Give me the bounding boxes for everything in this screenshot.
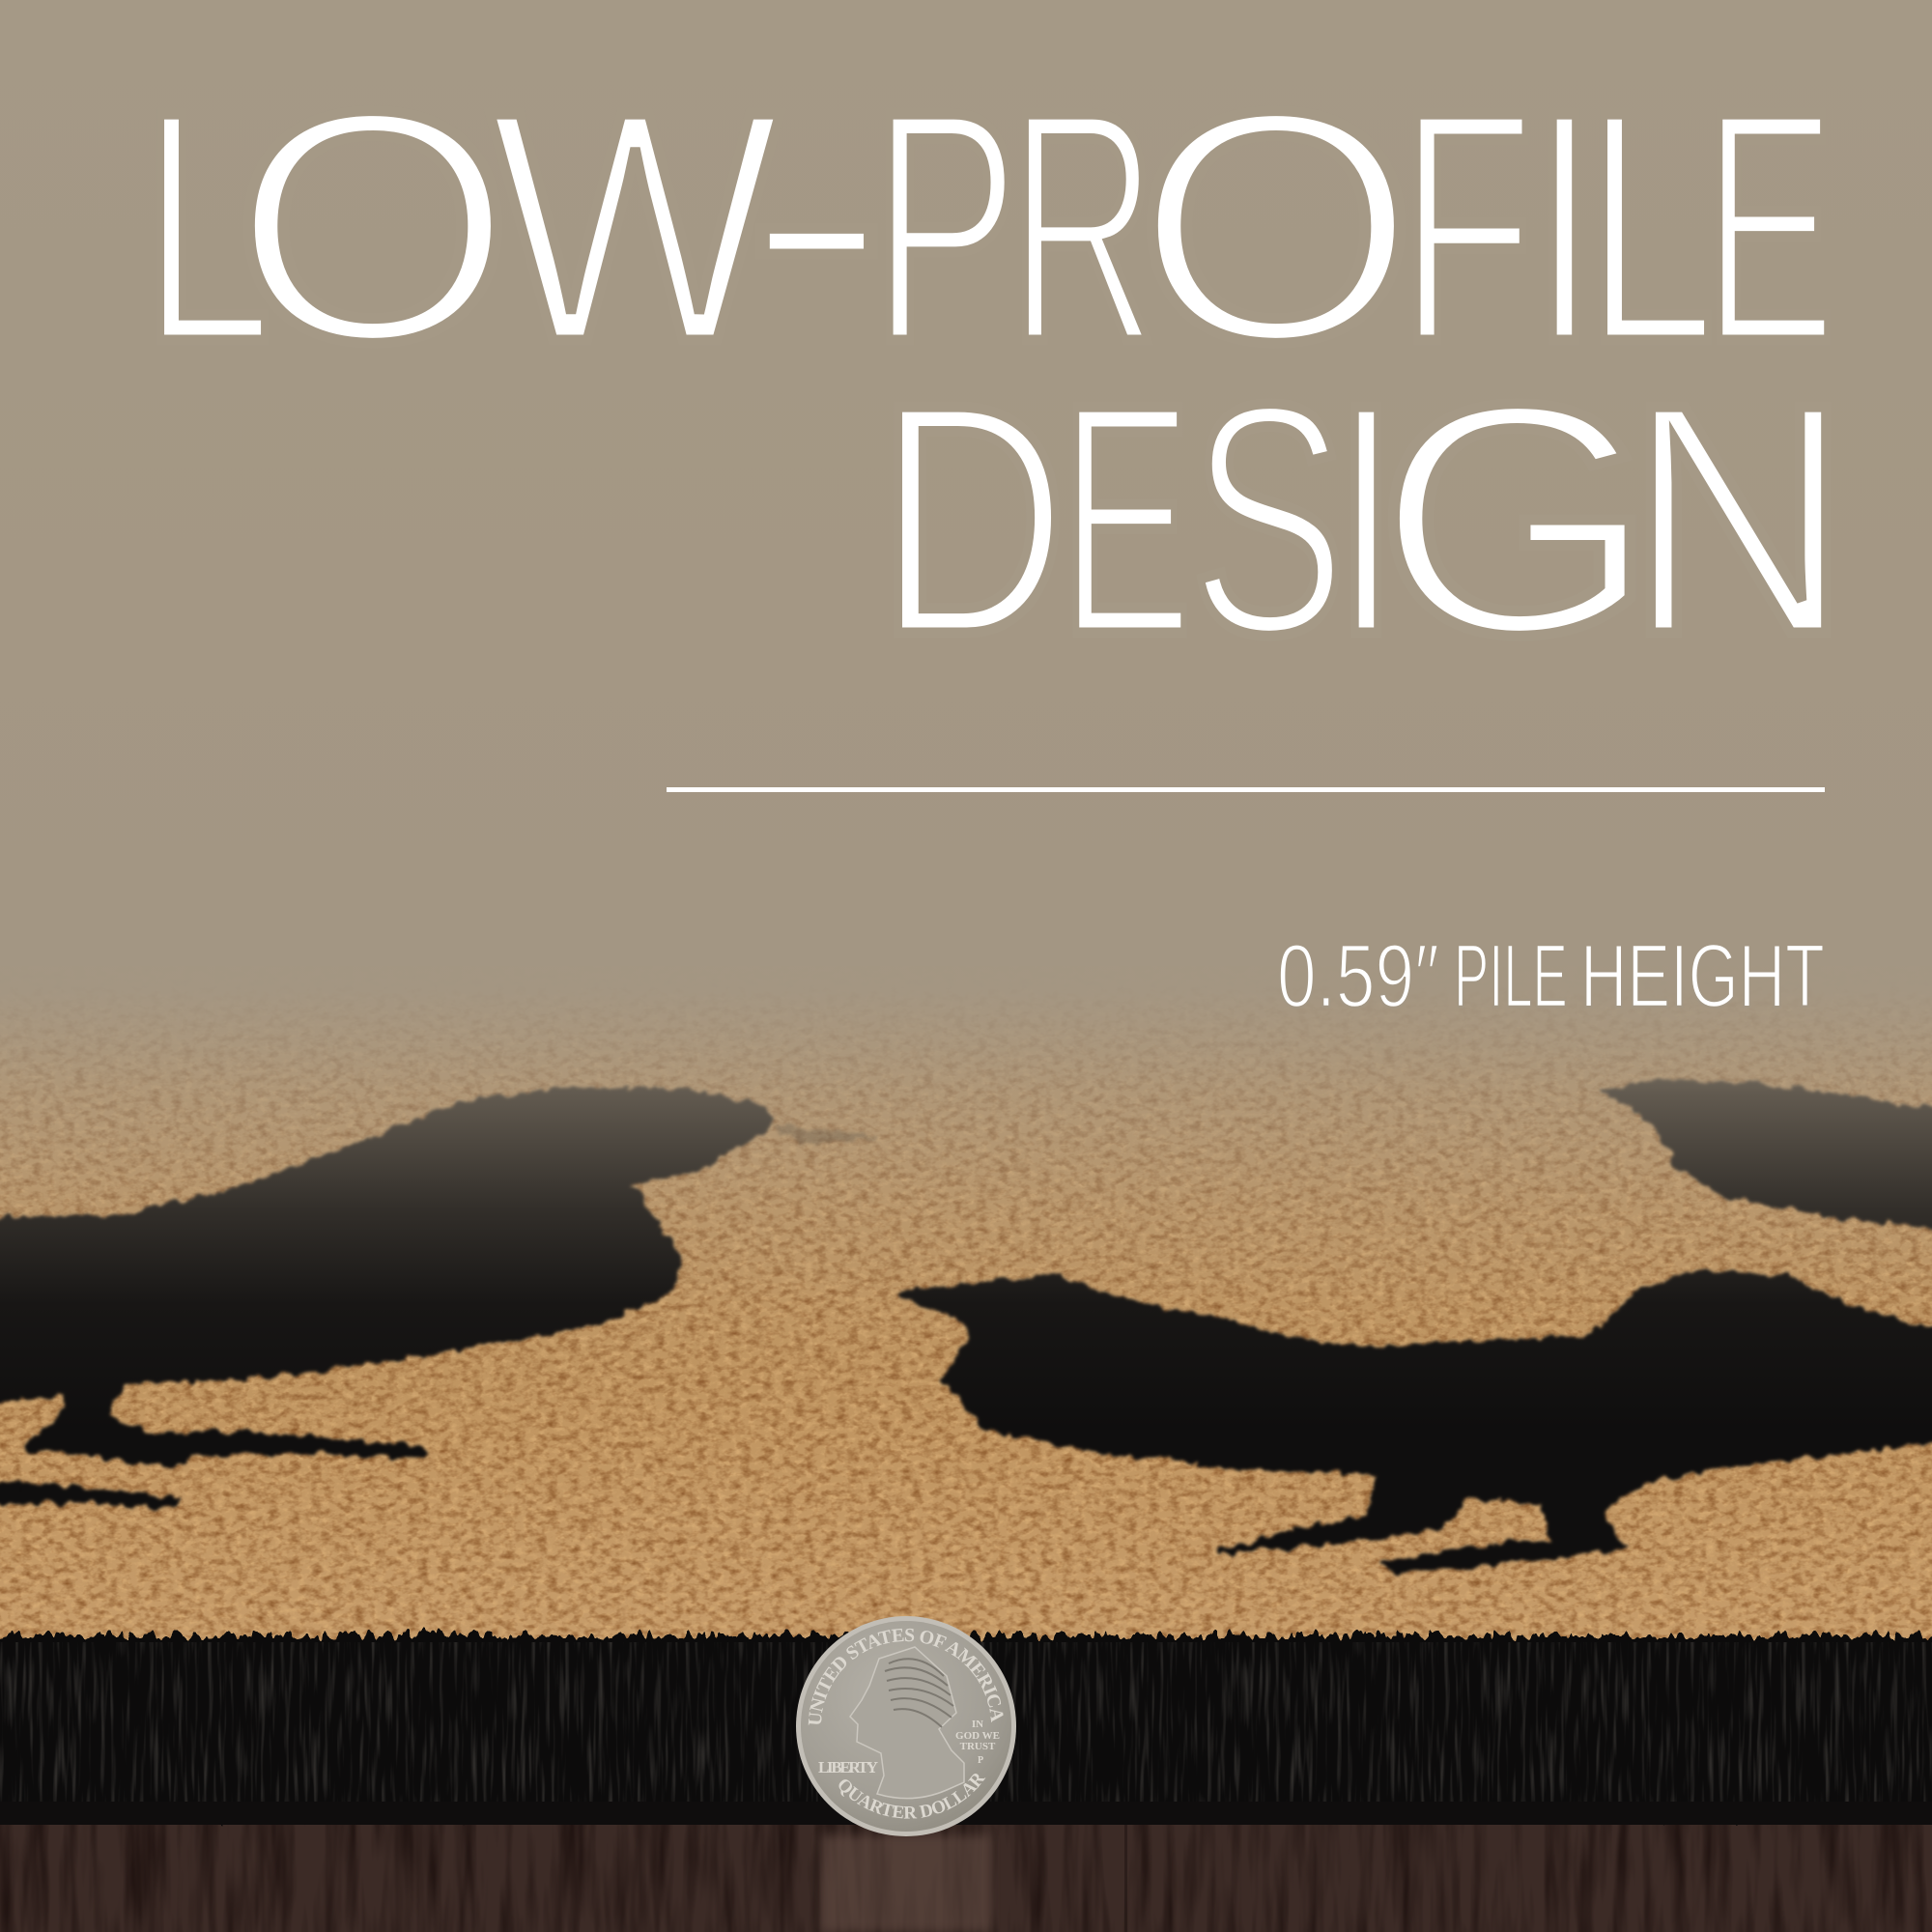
subtitle: pile height: PILE xyxy=(1453,925,1567,1026)
mat surface xyxy=(0,966,1932,1662)
title line one: O xyxy=(232,43,514,411)
title line two: G xyxy=(1376,336,1658,703)
coin hair xyxy=(885,1659,953,1727)
coin legends: TRUST xyxy=(960,1741,996,1752)
quarter coin xyxy=(796,1616,1016,1836)
title line two: I xyxy=(1332,336,1401,703)
coin legends: IN xyxy=(972,1719,983,1730)
subtitle: pile height: 0.59″ xyxy=(1277,925,1439,1026)
background wall xyxy=(0,0,1932,1005)
coin legends xyxy=(808,1629,1003,1819)
coin legends: QUARTER DOLLAR xyxy=(838,1774,985,1819)
subtitle: pile height: HEIGHT xyxy=(1580,925,1825,1026)
title line one: R xyxy=(1009,43,1157,411)
wood floor xyxy=(0,1821,1932,1932)
title line one: I xyxy=(1530,43,1599,411)
atmospheric haze over far mat xyxy=(0,927,1932,1430)
coin legends: LIBERTY xyxy=(818,1758,878,1776)
coin portrait xyxy=(850,1647,964,1799)
title: LOW-PROFILE DESIGN xyxy=(141,32,1852,703)
title line one: P xyxy=(871,43,1020,411)
title line one: L xyxy=(141,43,272,411)
faint beak xyxy=(777,1127,875,1144)
title line two: S xyxy=(1190,336,1347,703)
title line two: D xyxy=(876,336,1068,703)
right rooster xyxy=(899,1273,1932,1571)
title line one: F xyxy=(1399,43,1535,411)
left rooster xyxy=(0,1090,773,1466)
coin legends: P xyxy=(978,1755,983,1766)
title line one xyxy=(141,32,1835,411)
title line two xyxy=(876,336,1852,703)
title line two: E xyxy=(1060,336,1192,703)
black mat edge xyxy=(0,1635,1932,1825)
title line one: W xyxy=(489,43,781,411)
upper right rooster xyxy=(1602,1082,1932,1233)
title line two: N xyxy=(1625,336,1852,703)
rooster silhouettes xyxy=(0,1082,1932,1571)
title line one: - xyxy=(743,32,891,399)
subtitle: pile height xyxy=(1277,925,1825,1026)
title line one: O xyxy=(1135,43,1417,411)
title line one: E xyxy=(1703,43,1835,411)
title line one: L xyxy=(1584,43,1716,411)
coin legends: GOD WE xyxy=(955,1730,1000,1742)
left rooster lower foot xyxy=(0,1482,179,1506)
coin legends: UNITED STATES OF AMERICA xyxy=(808,1629,1003,1725)
